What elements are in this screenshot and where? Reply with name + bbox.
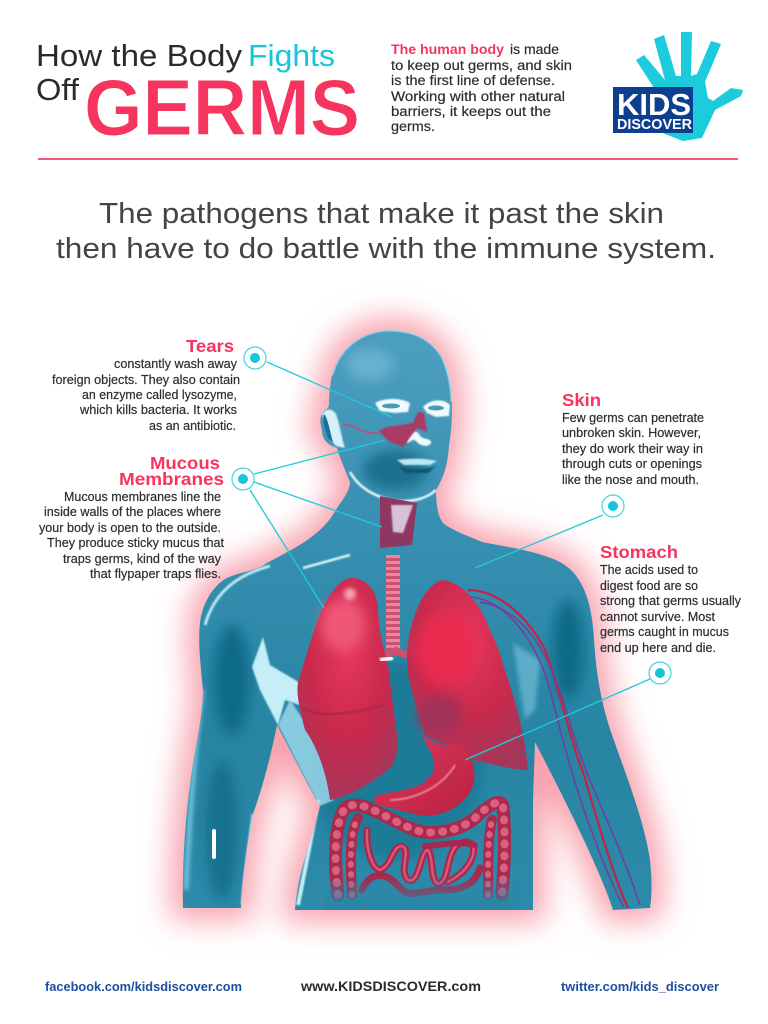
callout: Mucous Membranes: Mucous membranes line the [64,490,221,504]
callout: Skin: like the nose and mouth. [562,473,699,487]
title [36,38,360,152]
intro text: The human body [391,42,505,57]
callout: Skin [562,390,704,517]
callout: Mucous Membranes: They produce sticky mucus that [47,536,224,550]
tagline heading: then have to do battle with the immune system. [56,233,716,265]
footer links: facebook.com/kidsdiscover.com [45,979,242,994]
footer links: twitter.com/kids_discover [561,979,719,994]
face details [322,399,450,477]
trachea [378,555,408,664]
callout lines [250,362,650,760]
marker: Mucous [232,468,254,490]
arm blood vessels [468,590,640,908]
callout: Tears: constantly wash away [114,357,238,371]
title: GERMS [84,63,360,152]
marker: Skin [602,495,624,517]
callout: Tears [52,336,266,433]
callout: Mucous Membranes [39,453,254,581]
intro text: is the first line of defense. [391,73,555,88]
callout: Stomach: germs caught in mucus [600,625,729,639]
icon: cyan hand [636,32,743,141]
logo: Kids Discover hand [613,32,743,141]
callout: Stomach: The acids used to [600,563,698,577]
logo: Kids Discover hand: DISCOVER [617,116,692,133]
callout: Mucous Membranes: inside walls of the places where [44,505,221,519]
callout: Mucous Membranes: Mucous [150,453,220,473]
callout: Stomach: end up here and die. [600,641,716,655]
marker: Stomach [649,662,671,684]
right lung [407,580,528,770]
body illustration [183,330,652,910]
callout: Stomach: cannot survive. Most [600,610,715,624]
silhouette [183,330,652,910]
footer links [45,978,719,994]
tagline heading: The pathogens that make it past the skin [99,198,664,230]
callout: Tears: Tears [186,336,234,356]
callout: Skin: Skin [562,390,601,410]
callout: Stomach [600,542,742,684]
intro text: to keep out germs, and skin [391,58,572,73]
title: Off [36,72,79,107]
callout: Skin: Few germs can penetrate [562,411,704,425]
callout: Tears: as an antibiotic. [149,419,236,433]
lung highlights [302,588,476,735]
tagline heading [56,198,716,265]
logo: Kids Discover hand: KIDS [617,87,691,122]
callout: Skin: through cuts or openings [562,457,702,471]
intro text: is made [510,42,559,57]
shading [186,330,584,905]
sinus [343,412,427,447]
callout: Mucous Membranes: traps germs, kind of the way [63,552,222,566]
intro text: Working with other natural [391,89,565,104]
intro text [391,42,572,134]
callout: Mucous Membranes: that flypaper traps flies. [90,567,221,581]
callout: Mucous Membranes: Membranes [119,469,224,489]
callout: Mucous Membranes: your body is open to the outside. [39,521,221,535]
small intestine [362,830,480,893]
callout: Tears: which kills bacteria. It works [79,403,237,417]
callout: Skin: unbroken skin. However, [562,426,701,440]
callout: Stomach: digest food are so [600,579,698,593]
stomach [374,735,475,816]
title: How the Body [36,38,243,73]
marker: Tears [244,347,266,369]
logo box [613,87,693,133]
left lung [297,578,397,800]
callout: Skin: they do work their way in [562,442,703,456]
neck tissue [380,496,417,548]
intro text: germs. [391,119,435,134]
callout: Stomach: strong that germs usually [600,594,742,608]
callout: Tears: foreign objects. They also contain [52,373,240,387]
pink glow [183,330,652,910]
callout: Tears: an enzyme called lysozyme, [82,388,237,402]
callout: Stomach: Stomach [600,542,678,562]
footer links: www.KIDSDISCOVER.com [300,978,481,994]
intro text: barriers, it keeps out the [391,104,551,119]
large intestine [336,803,505,895]
title: Fights [248,38,335,73]
